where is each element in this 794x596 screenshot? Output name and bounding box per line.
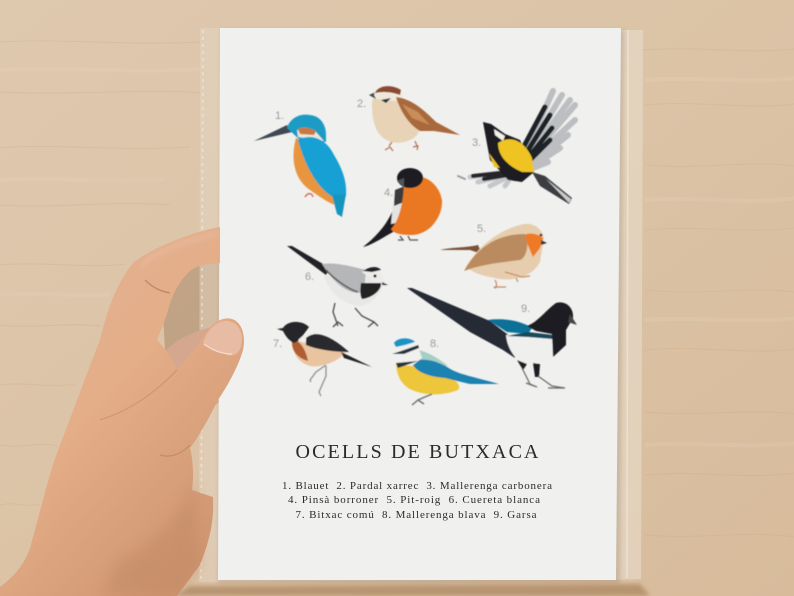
number 8: 8. [430,338,439,350]
bird 1: kingfisher [254,110,346,217]
bird 3: great tit in flight [458,91,575,204]
hand holding the print [0,227,244,596]
number 5: 5. [477,223,486,235]
bird 2: sparrow [357,86,460,151]
bird 9: magpie [407,288,577,388]
plastic sleeve [199,28,643,582]
number 3: 3. [472,137,481,149]
bird 5: robin [440,223,547,288]
paper print [218,28,621,580]
bird 6: white wagtail [287,246,388,327]
species legend [282,480,552,521]
number 6: 6. [305,271,314,283]
number 2: 2. [357,98,366,110]
number 9: 9. [521,303,530,315]
number 1: 1. [275,110,284,122]
number 7: 7. [273,338,282,350]
number 4: 4. [384,187,393,199]
shadow behind the hand fingers [160,262,222,350]
shadow beneath print [175,584,650,596]
middle finger behind thumb [165,326,222,420]
species legend: 4. Pinsà borroner 5. Pit-roig 6. Cuereta blanca [288,494,540,506]
bird 4: bullfinch [363,168,442,247]
paper print shadow [218,30,624,583]
title: OCELLS DE BUTXACA [296,441,539,463]
bird 8: blue tit [392,338,499,405]
bird 7: stonechat [273,322,372,396]
species legend: 1. Blauet 2. Pardal xarrec 3. Mallerenga carbonera [282,480,552,492]
thumbnail [203,321,242,355]
species legend: 7. Bitxac comú 8. Mallerenga blava 9. Garsa [296,509,537,521]
